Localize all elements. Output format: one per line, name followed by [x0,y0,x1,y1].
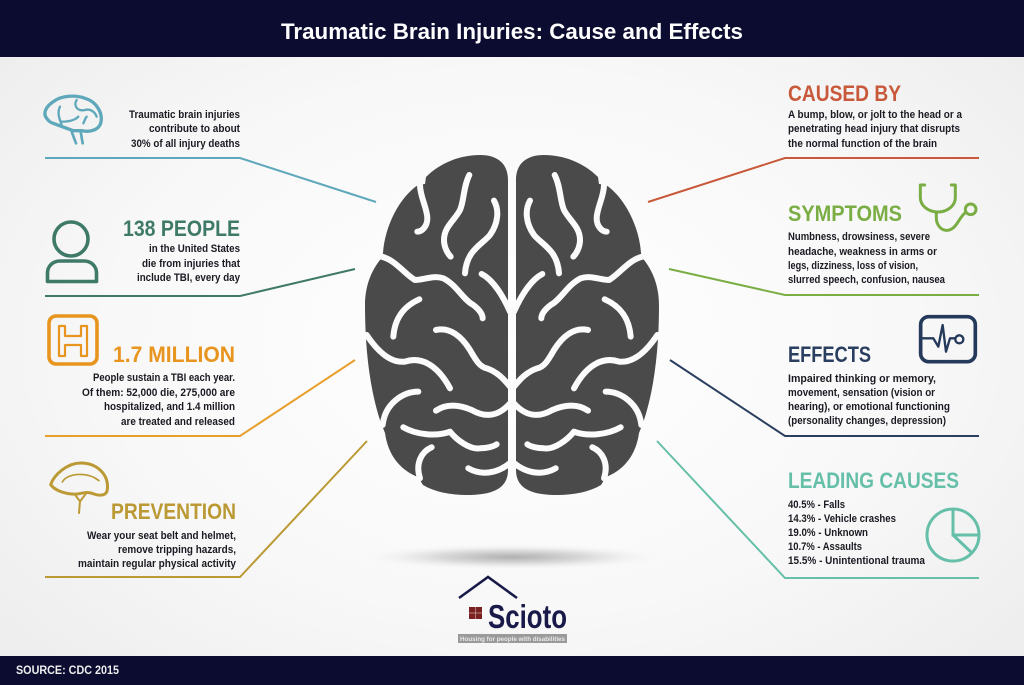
panel: 138 people: include TBI, every day [137,272,241,284]
panel: symptoms: headache, weakness in arms or [788,246,938,258]
panel: effects: Impaired thinking or memory, [788,373,936,385]
panel: leading causes [657,441,979,578]
brain shadow [357,544,667,570]
icon: pie chart [927,509,979,561]
panel: effects: movement, sensation (vision or [788,387,936,399]
Scioto logo: Housing for people with disabilities [460,637,566,643]
Scioto logo [458,577,567,643]
panel: 1.7 million: 1.7 MILLION [113,342,235,367]
panel: leading causes: 40.5% - Falls [788,499,845,511]
icon: heart monitor [921,317,975,362]
panel: effects: EFFECTS [788,342,871,367]
panel: effects: hearing), or emotional functioning [788,401,950,413]
panel: brain deaths stat: 30% of all injury deaths [131,138,240,150]
footer source bar: SOURCE: CDC 2015 [16,665,120,677]
panel: 138 people: die from injuries that [142,258,240,270]
panel: prevention: maintain regular physical activity [78,558,237,570]
panel: leading causes: 19.0% - Unknown [788,527,868,539]
panel: caused by: the normal function of the brain [788,138,937,150]
panel: 1.7 million: are treated and released [121,416,235,428]
panel: symptoms: Numbness, drowsiness, severe [788,231,930,243]
header bar with title [0,0,1024,57]
panel: prevention [45,441,367,577]
panel: leading causes: 14.3% - Vehicle crashes [788,513,896,525]
panel: leading causes: 10.7% - Assaults [788,541,862,553]
panel: 1.7 million: People sustain a TBI each year. [93,372,235,384]
icon: hospital H [49,316,97,364]
panel: prevention: remove tripping hazards, [118,544,236,556]
panel: brain deaths stat [45,96,376,202]
panel: leading causes: 15.5% - Unintentional trauma [788,555,926,567]
panel: symptoms: SYMPTOMS [788,201,902,226]
panel: caused by: CAUSED BY [788,81,901,106]
panel: prevention: PREVENTION [111,499,236,524]
panel: symptoms: slurred speech, confusion, nausea [788,274,946,286]
panel: 138 people [45,216,355,296]
header bar with title: Traumatic Brain Injuries: Cause and Effects [281,19,743,44]
panel: symptoms: legs, dizziness, loss of vision, [788,260,918,272]
panel: 1.7 million [45,316,355,436]
icon: helmet [51,463,107,513]
icon: brain [45,96,101,143]
panel: 1.7 million: Of them: 52,000 die, 275,000 are [82,387,235,399]
panel: brain deaths stat: contribute to about [149,123,240,135]
central brain illustration [365,155,659,495]
icon: stethoscope [920,185,976,230]
panel: leading causes: LEADING CAUSES [788,468,959,493]
panel: caused by [648,81,979,202]
panel: 1.7 million: hospitalized, and 1.4 million [104,401,235,413]
panel: effects [670,317,979,436]
panel: effects: (personality changes, depression) [788,415,946,427]
panel: symptoms [669,185,979,295]
panel: prevention: Wear your seat belt and helmet, [87,530,236,542]
footer source bar [0,656,1024,685]
panel: 138 people: in the United States [149,243,240,255]
panel: caused by: A bump, blow, or jolt to the head or a [788,109,963,121]
panel: brain deaths stat: Traumatic brain injuries [129,109,240,121]
Scioto logo: Scioto [488,598,567,635]
icon: person [48,222,96,282]
panel: caused by: penetrating head injury that disrupts [788,123,960,135]
panel: 138 people: 138 PEOPLE [123,216,240,241]
